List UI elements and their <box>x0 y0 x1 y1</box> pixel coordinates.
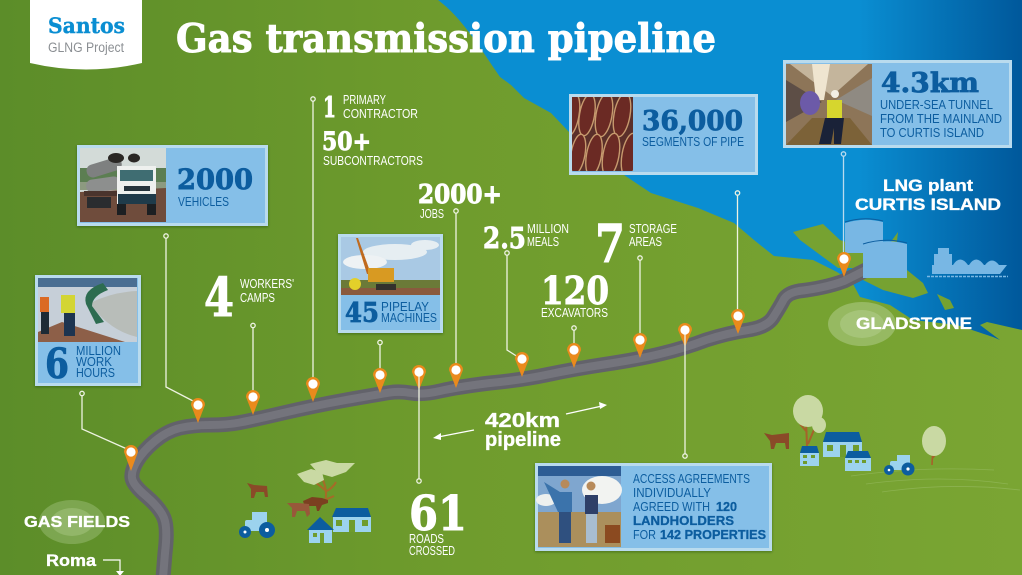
photo: pipelayer <box>341 237 440 295</box>
farm scene: left <box>239 460 371 543</box>
house <box>823 432 862 457</box>
stat: 2000+ jobs <box>418 180 502 221</box>
stat: 120 excavators: 120 <box>541 268 609 313</box>
callout: 36,000 segments of pipe <box>561 92 758 178</box>
callout: 45 pipelay machines <box>338 234 443 333</box>
stat: 1 primary contractor: 1 <box>323 91 336 124</box>
arrow: 420km left <box>433 430 474 440</box>
callout: 36,000 segments of pipe: SEGMENTS OF PIPE <box>642 134 744 149</box>
house <box>800 446 819 466</box>
callout: 4.3km under-sea tunnel: FROM THE MAINLAND <box>880 111 1002 126</box>
stat: 61 roads crossed: ROADS <box>409 532 444 546</box>
leader lines with end dots <box>80 97 846 449</box>
cow <box>764 433 789 449</box>
stat: 2.5 million meals <box>483 221 569 255</box>
gas fields marker and label: GAS FIELDS <box>24 514 130 531</box>
stat: 7 storage areas: AREAS <box>629 235 662 249</box>
callout: 4.3km under-sea tunnel: UNDER-SEA TUNNEL <box>880 97 993 112</box>
stat: 4 workers' camps: WORKERS' <box>240 276 294 291</box>
stat: 2000+ jobs: JOBS <box>420 207 444 221</box>
callout: 2000 vehicles: VEHICLES <box>178 194 229 209</box>
photo: pipe segments <box>572 97 633 171</box>
Curtis Island <box>793 224 928 298</box>
Gladstone marker and label: GLADSTONE <box>856 314 972 333</box>
label: LNG plant Curtis Island <box>855 176 1001 214</box>
callout: 45 pipelay machines: PIPELAY <box>381 299 429 314</box>
tractor <box>239 512 275 538</box>
photo: tunnel worker <box>786 64 872 145</box>
callout: access agreements: 120 <box>716 500 737 514</box>
stat: 1 primary contractor: PRIMARY <box>343 93 386 107</box>
callout: 45 pipelay machines: MACHINES <box>381 310 437 325</box>
tractor <box>884 455 914 476</box>
title: Gas transmission pipeline <box>176 16 716 62</box>
farm scene: right <box>764 395 1020 492</box>
callout: 2000 vehicles <box>77 145 268 226</box>
tree <box>793 395 826 446</box>
house <box>845 451 871 471</box>
tree <box>922 426 946 465</box>
callout: access agreements <box>535 463 772 551</box>
callout: 6 million work hours: 6 <box>45 340 69 388</box>
callout: 6 million work hours: MILLION <box>76 344 121 358</box>
icon: LNG ship <box>927 248 1008 276</box>
callout: 6 million work hours: WORK <box>76 355 113 369</box>
photo: pipe handling <box>38 278 137 342</box>
callout: 2000 vehicles: 2000 <box>177 163 253 196</box>
label: 420km pipeline <box>485 410 561 451</box>
label: 420km pipeline: 420km <box>485 410 560 432</box>
stat: 61 roads crossed: 61 <box>409 486 467 542</box>
stat: 7 storage areas: 7 <box>595 214 625 275</box>
tree <box>297 460 355 502</box>
label: LNG plant Curtis Island: CURTIS ISLAND <box>855 195 1001 214</box>
label and arrow: Roma <box>46 552 124 575</box>
Gladstone marker and label <box>828 302 972 346</box>
callout: access agreements: AGREED WITH <box>633 499 710 514</box>
arrow: 420km right <box>566 402 607 414</box>
photo: landholders <box>536 466 622 547</box>
pipeline <box>132 270 866 575</box>
callout: access agreements: INDIVIDUALLY <box>633 485 711 500</box>
photo: pipe truck <box>80 148 166 222</box>
label: LNG plant Curtis Island: LNG plant <box>883 176 973 195</box>
callout: access agreements: 142 PROPERTIES <box>660 528 766 542</box>
sea and coastline <box>438 0 1022 340</box>
cow <box>247 483 268 498</box>
label and arrow: Roma: Roma <box>46 552 97 570</box>
cow <box>287 503 310 517</box>
label: 420km pipeline: pipeline <box>485 429 561 451</box>
stat: 120 excavators: EXCAVATORS <box>541 306 608 320</box>
logo: Santos GLNG Project <box>30 0 142 70</box>
callout: 6 million work hours <box>35 275 141 388</box>
islet <box>937 294 954 310</box>
stat: 50+ subcontractors: 50+ <box>322 127 371 156</box>
house <box>332 508 371 532</box>
cow <box>303 497 328 511</box>
house <box>307 517 334 543</box>
callout: 4.3km under-sea tunnel: TO CURTIS ISLAND <box>880 125 984 140</box>
callout: 4.3km under-sea tunnel: 4.3km <box>881 68 979 99</box>
callout: access agreements: LANDHOLDERS <box>633 514 734 528</box>
stat: 7 storage areas <box>595 214 677 275</box>
logo: Santos GLNG Project: GLNG Project <box>48 40 124 55</box>
callout: 6 million work hours: HOURS <box>76 366 115 380</box>
stat: 4 workers' camps: 4 <box>204 267 234 329</box>
pins on pipeline <box>124 252 851 483</box>
tanks: LNG plant <box>845 219 907 278</box>
stat: 61 roads crossed <box>409 486 467 558</box>
callout: access agreements: FOR <box>633 527 656 542</box>
callout: 45 pipelay machines: 45 <box>345 298 379 329</box>
callout: 4.3km under-sea tunnel <box>783 60 1012 148</box>
stat: 4 workers' camps <box>204 267 294 329</box>
gas fields marker and label <box>24 500 130 544</box>
stat: 61 roads crossed: CROSSED <box>409 544 455 558</box>
stat: 2.5 million meals: 2.5 <box>483 221 526 255</box>
stat: 50+ subcontractors: SUBCONTRACTORS <box>323 154 423 168</box>
stat: 7 storage areas: STORAGE <box>629 222 677 236</box>
stat: 4 workers' camps: CAMPS <box>240 290 275 305</box>
callout: access agreements: ACCESS AGREEMENTS <box>633 471 750 486</box>
stat: 50+ subcontractors <box>322 127 423 168</box>
stat: 2000+ jobs: 2000+ <box>418 180 502 210</box>
stat: 2.5 million meals: MILLION <box>527 222 569 236</box>
stat: 1 primary contractor: CONTRACTOR <box>343 107 418 121</box>
grass lines <box>851 469 1020 492</box>
callout: 36,000 segments of pipe: 36,000 <box>642 106 743 137</box>
logo: Santos GLNG Project: Santos <box>48 13 125 38</box>
stat: 2.5 million meals: MEALS <box>527 235 559 249</box>
stat: 1 primary contractor <box>323 91 418 124</box>
